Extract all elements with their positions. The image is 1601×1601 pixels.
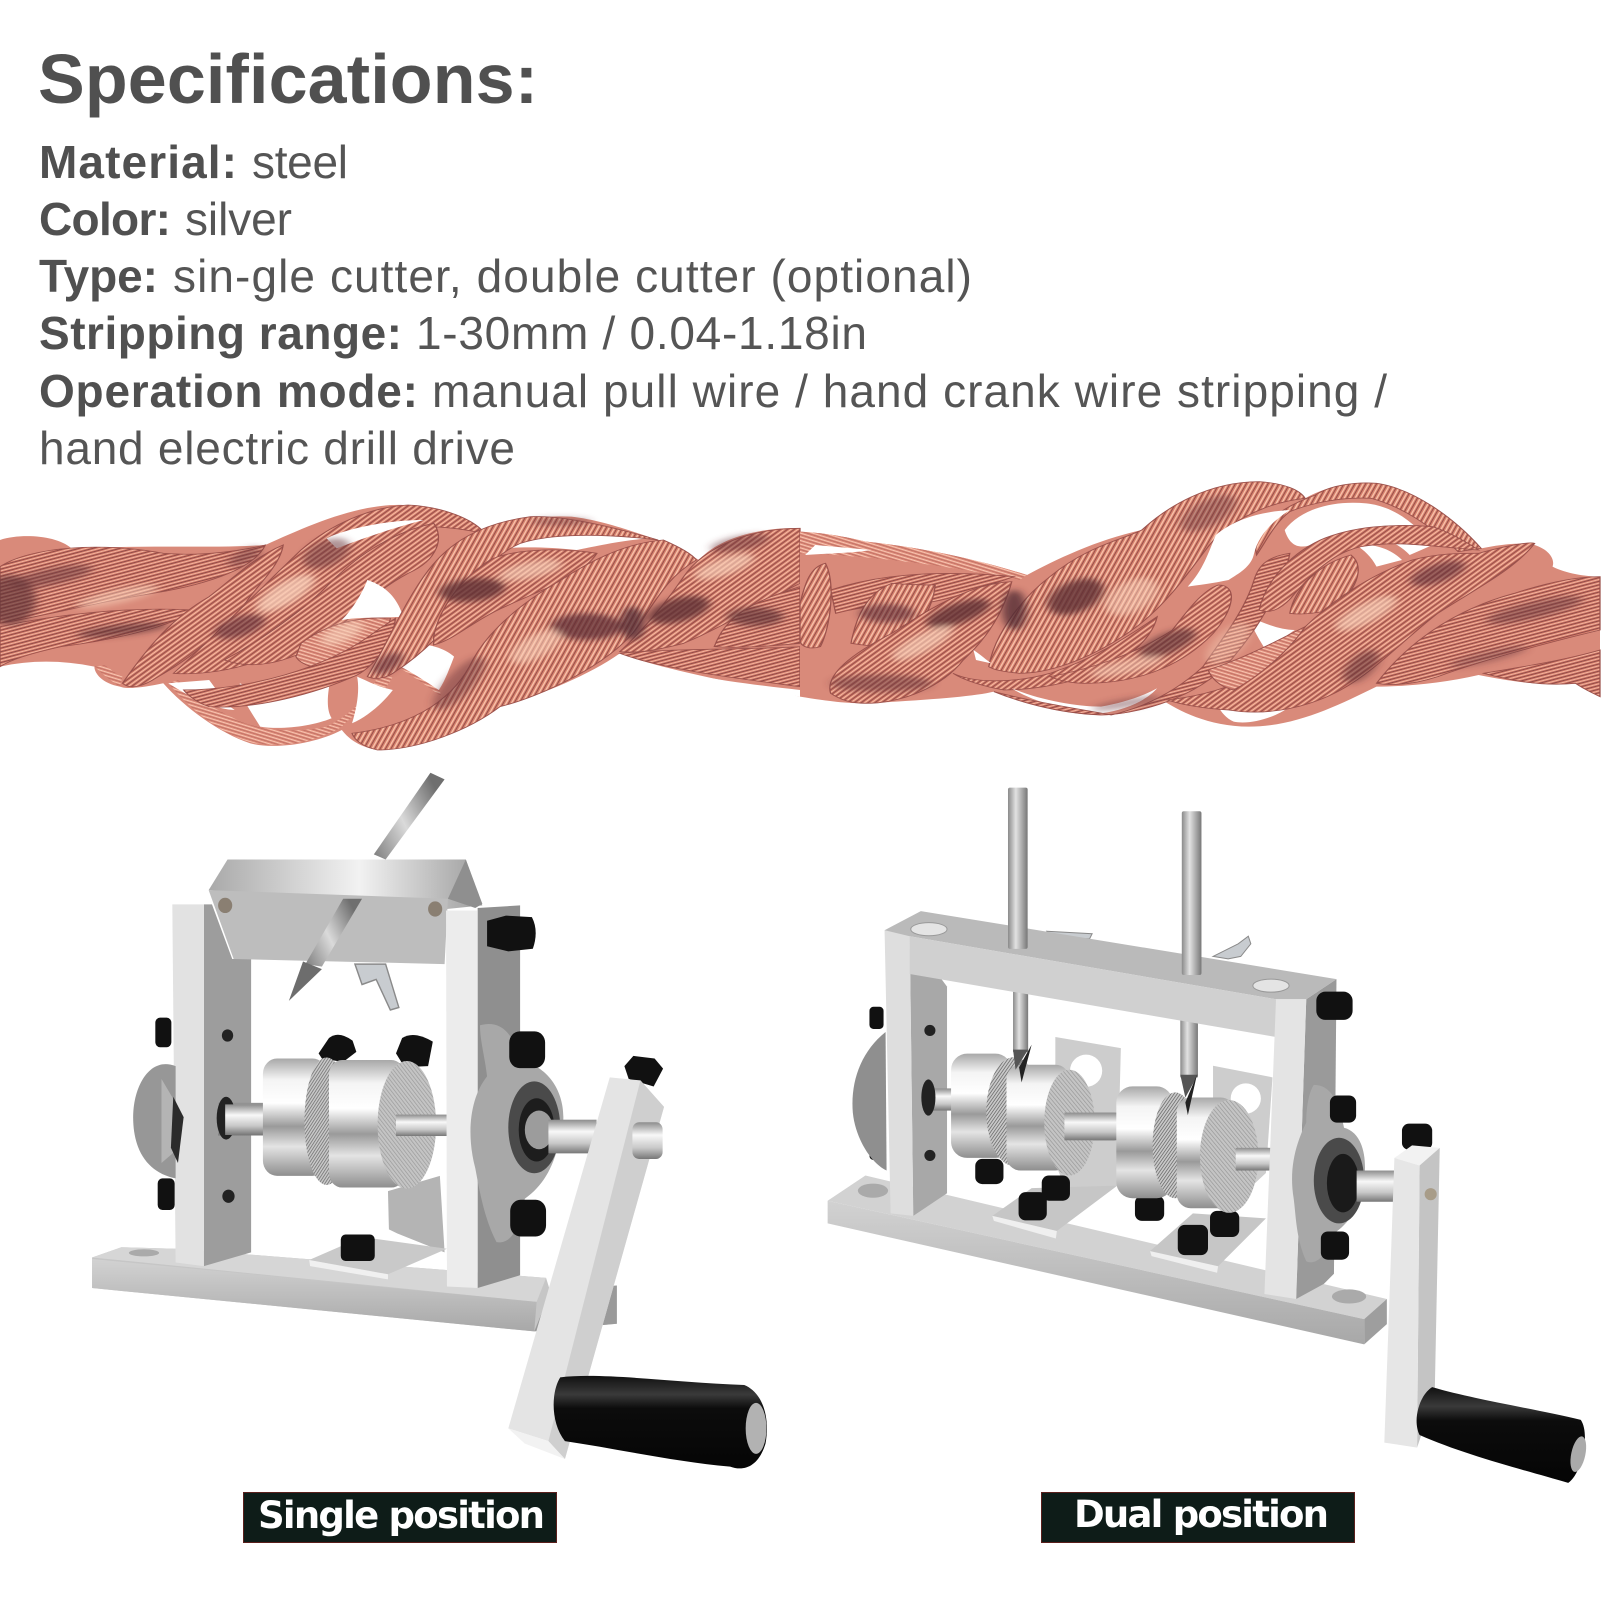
label: dual position: Dual position [1074, 1493, 1329, 1536]
left bearing [133, 1018, 184, 1210]
spec: color [39, 193, 292, 245]
spec: material: Material: [39, 136, 237, 188]
right bearing [470, 1024, 597, 1242]
spec: type: Type: [39, 250, 158, 302]
spec: operation mode: hand electric drill drive [39, 422, 515, 474]
specification list [39, 136, 1387, 474]
left upright frame [172, 904, 251, 1266]
top bar [885, 788, 1336, 1037]
right bearing [1292, 1085, 1397, 1262]
title: Specifications: [38, 40, 538, 118]
spec: color: Color: [39, 193, 171, 245]
dual position wire stripper machine [828, 788, 1589, 1483]
rear bracket [388, 1176, 445, 1252]
spec: stripping range [39, 307, 867, 359]
crank arm and handle [508, 1056, 767, 1468]
spec: operation mode: manual pull wire / hand crank wire stripping / [432, 365, 1387, 417]
left upright frame [885, 930, 947, 1216]
right upright frame [446, 905, 536, 1288]
copper wire bundle photo [0, 482, 1600, 750]
lower bracket plate [309, 1234, 447, 1279]
right upright frame front [1264, 992, 1353, 1299]
right upright frame rear [1296, 979, 1336, 1299]
mounting plates and bolts [975, 1159, 1266, 1273]
spec: color: silver [185, 193, 292, 245]
label: single position: Single position [258, 1494, 545, 1537]
top block with cutter [209, 773, 482, 1010]
spec: material: steel [252, 136, 348, 188]
spec: stripping range: 1-30mm / 0.04-1.18in [416, 307, 867, 359]
spec: type: sin-gle cutter, double cutter (optional) [173, 250, 972, 302]
base bar [828, 1176, 1387, 1344]
spec: operation mode [39, 365, 1387, 474]
cutter pins upper and lower [1013, 992, 1198, 1115]
rollers and shaft [921, 1054, 1271, 1213]
cutter rollers and shaft [217, 1035, 448, 1189]
single position wire stripper machine [92, 773, 767, 1468]
spec: material [39, 136, 348, 188]
spec: operation mode: Operation mode: [39, 365, 418, 417]
wing nuts behind bar [1047, 931, 1251, 959]
brackets [1055, 1037, 1272, 1208]
spec: stripping range: Stripping range: [39, 307, 402, 359]
crank arm and handle [1384, 1124, 1589, 1483]
left bearing [852, 1007, 887, 1171]
base bar [92, 1247, 617, 1331]
